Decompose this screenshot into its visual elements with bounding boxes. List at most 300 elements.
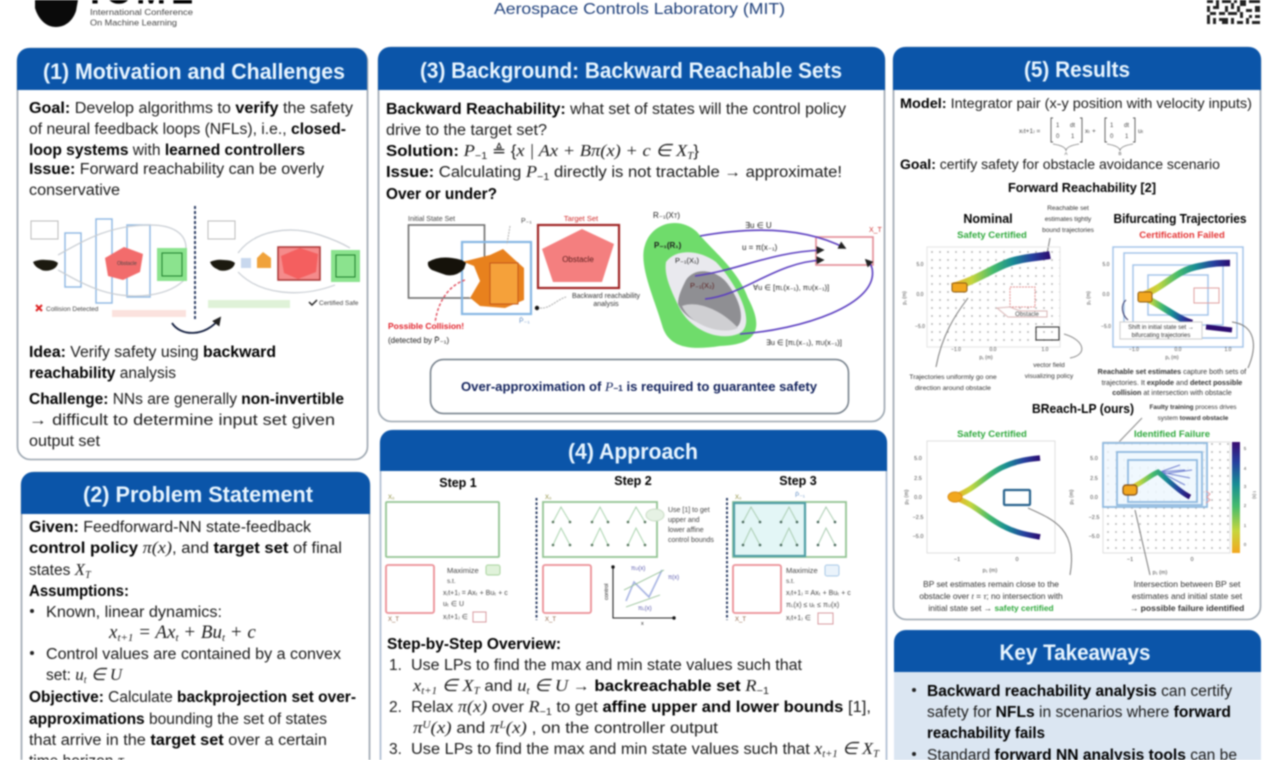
text block: step-by-step overview: T: [474, 686, 481, 697]
chart: BReach-LP identified failure: 4: [1244, 466, 1247, 471]
chart: bifurcating trajectories: p₂ (m): [1086, 291, 1092, 305]
nested sets: [1103, 443, 1207, 507]
right: backward sets: [241, 258, 251, 268]
text block: step-by-step overview: to get: [552, 699, 602, 716]
diagram: over and under approximation: analysis: [593, 301, 619, 308]
text block: step-by-step overview: affine upper and lower bounds [1],: [602, 699, 869, 716]
text block: step-by-step overview: 2.: [389, 699, 402, 716]
text block: challenge: output set: [29, 433, 101, 450]
callout: over-approximation: [430, 360, 848, 414]
right: state box: [208, 221, 235, 239]
step 2 figure: control: [604, 583, 610, 600]
step 2 figure: upper and: [668, 517, 700, 524]
text block: definition: directly is not tractable → approximate!: [549, 164, 842, 181]
text block: assumptions: t: [222, 632, 226, 644]
step 2 figure: X₀: [545, 495, 552, 501]
subheading: forward reachability: Forward Reachability [2]: [1008, 181, 1156, 195]
annotation text: Reachable set estimates capture both sets of: [1098, 367, 1246, 376]
input set with backprojection: [733, 502, 846, 557]
annotation box: [1120, 322, 1202, 339]
chart: nominal: bound trajectories: [1042, 227, 1095, 234]
text block: step-by-step overview: t: [526, 686, 530, 697]
diagram: over and under approximation: P₋₁: [521, 218, 532, 225]
annotation arrow: [1135, 510, 1150, 575]
text block: given: states X: [29, 560, 85, 579]
chart: BReach-LP identified failure: −2.5: [1089, 515, 1099, 521]
step 1 figure: x₍t+1₎ = Axₜ + Buₜ + c: [443, 590, 508, 597]
chart: nominal: p₂ (m): [902, 291, 908, 305]
heading: (3) Background: Backward Reachable Sets: [420, 58, 842, 83]
arrow: transition: [172, 318, 220, 333]
right: obstacle rectangle: [278, 247, 320, 280]
annotation: tight bounds: Reachable set: [1047, 205, 1089, 212]
text block: definition: Backward Reachability: what set of states will the control policy: [386, 101, 846, 118]
equation: dynamics: A: [1064, 151, 1068, 156]
chart: BReach-LP identified failure: −5.0: [1089, 534, 1099, 540]
axis labels: −1.0: [951, 347, 961, 353]
left: collision label: [36, 305, 42, 311]
chart: nominal: −5.0: [915, 324, 925, 330]
text block: definition: x | Ax + Bπ(x) + c ∈ X: [515, 141, 688, 160]
chart: BReach-LP identified failure: 3: [1244, 484, 1247, 489]
target: [386, 565, 434, 613]
panel frame: [378, 48, 884, 422]
text block: assumptions: t: [84, 675, 87, 686]
step 2 figure: πL(x): [638, 606, 652, 612]
diagram: over and under approximation: Possible Collision!: [388, 321, 464, 331]
text block: definition: −1: [475, 151, 488, 162]
panel frame: [380, 430, 886, 760]
equation: dynamics: 0: [1110, 134, 1114, 140]
chart: BReach-LP identified failure: 2.5: [1090, 476, 1098, 482]
equation: dynamics: 1: [1110, 123, 1114, 129]
affiliation line: Aerospace Controls Laboratory (MIT): [494, 1, 785, 18]
chart: BReach-LP identified failure: 0: [1190, 557, 1194, 563]
over-approximation: [462, 242, 531, 314]
text block: assumptions: Control values are contained by a convex: [46, 646, 341, 663]
partition leaf dots: [742, 521, 836, 546]
left: trajectories: [58, 225, 186, 296]
vector field: [1036, 327, 1059, 340]
takeaway list: Backward reachability analysis can certify: [927, 683, 1232, 700]
chart: BReach-LP identified failure: [1069, 429, 1257, 613]
step 2 figure: lower affine: [668, 527, 704, 534]
diagram: over and under approximation: ∃u ∈ [πL(x₋₁), πU(x₋₁)]: [766, 338, 842, 347]
diagram: over and under approximation: Obstacle: [562, 255, 594, 264]
text block: definition: ≜ {: [487, 142, 516, 160]
heading: (2) Problem Statement: [83, 482, 314, 507]
diagram: over and under approximation: X_T: [869, 227, 883, 234]
left: goal: [157, 248, 187, 281]
partition trees: [743, 507, 835, 545]
plot area: [1103, 442, 1230, 553]
heading: Key Takeaways: [1000, 640, 1150, 665]
takeaway list: reachability fails: [927, 725, 1045, 742]
chart: bifurcating trajectories: [1086, 212, 1253, 397]
text block: given: Given: Feedforward-NN state-feedback: [29, 519, 311, 536]
text block: step-by-step overview: t+1: [822, 749, 838, 760]
diagram: over and under approximation: Backward reachability: [572, 293, 641, 300]
initial state: [948, 492, 962, 502]
text block: step-by-step overview: and: [480, 678, 517, 695]
text block: step-by-step overview: Relax π(x) over R: [411, 697, 539, 716]
text block: step-by-step overview: 3.: [389, 741, 402, 758]
chart: BReach-LP identified failure: 0: [1244, 542, 1247, 547]
chart: BReach-LP identified failure: 2: [1244, 503, 1247, 508]
annotation: trajectories: [936, 298, 968, 367]
obstacle: [1194, 288, 1219, 303]
chart: nominal: estimates tightly: [1045, 216, 1092, 223]
step 3 figure: [733, 474, 851, 624]
chart: nominal: visualizing policy: [1025, 373, 1074, 380]
chart: BReach-LP safety certified: Safety Certified: [957, 429, 1027, 440]
subheading: BReach-LP: BReach-LP (ours): [1032, 401, 1134, 416]
backprojection polygon: [462, 249, 524, 308]
target set: [538, 225, 619, 288]
diagram: over and under approximation: (detected by P̄₋₁): [388, 336, 450, 345]
step 1 figure: Step 1: [439, 476, 477, 490]
left: vehicle: [33, 260, 58, 271]
vehicle: [428, 258, 466, 275]
chart: BReach-LP safety certified: 0.0: [914, 495, 922, 501]
left: forward reachable sets: [65, 219, 150, 303]
initial state: [1123, 485, 1137, 495]
left: obstacle: [105, 247, 143, 280]
step 2 figure: x: [641, 621, 644, 627]
chart: nominal: Trajectories uniformly go one: [909, 374, 997, 381]
text block: step-by-step overview: ∈ X: [838, 739, 874, 758]
axis labels: 5.0: [1090, 456, 1098, 462]
diagram: forward vs backward reachability: Obstacle: [117, 261, 137, 267]
target: [733, 565, 781, 613]
panel header: [894, 630, 1261, 672]
step 3 figure: x₍t+1₎ ∈: [786, 615, 811, 622]
chart: nominal: Safety Certified: [957, 230, 1027, 241]
takeaway list: [912, 683, 1237, 760]
text block: step-by-step overview: (x): [506, 718, 527, 737]
right: goal: [331, 250, 360, 282]
diagram: over and under approximation: u = π(x₋₁): [742, 243, 778, 252]
equation: dynamics: xₜ +: [1085, 128, 1096, 135]
step 1 figure: X₀: [388, 495, 395, 501]
diagram: over and under approximation: P₋₁(X₁): [675, 256, 700, 265]
diagram: over and under approximation: R₋₁(XT): [653, 211, 680, 220]
chart: bifurcating trajectories: collision at intersection with obstacle: [1112, 388, 1232, 397]
initial state set: [408, 225, 484, 298]
text block: definition: Solution: P: [386, 141, 474, 160]
panel: (5) Results: [893, 47, 1261, 620]
chart: nominal: direction around obstacle: [915, 385, 991, 392]
text block: assumptions: + c: [225, 622, 256, 643]
panel: (1) Motivation and Challenges: [17, 48, 368, 460]
chart: nominal: 5.0: [917, 262, 924, 268]
heading: (4) Approach: [568, 439, 698, 464]
target: [543, 565, 591, 613]
chart: BReach-LP identified failure: 5: [1244, 446, 1247, 451]
chart: BReach-LP identified failure: −1: [1127, 557, 1133, 563]
text block: step-by-step overview: (x): [431, 718, 452, 737]
text block: given: [29, 519, 342, 581]
text block: step-by-step overview: t+1: [421, 686, 437, 697]
step 1 figure: [386, 476, 508, 623]
equation: dynamics: dt: [1124, 123, 1129, 129]
text block: definition: drive to the target set?: [386, 122, 547, 139]
text block: step-by-step overview: x: [412, 676, 422, 695]
trajectory band: [1126, 472, 1190, 497]
chart: bifurcating trajectories: 0.0: [1103, 292, 1110, 298]
text block: assumptions: x: [109, 622, 117, 643]
chart: affine relaxation: [613, 568, 674, 618]
text block: objective: approximations bounding the set of states: [29, 711, 327, 728]
diagram: forward vs backward reachability: Collision Detected: [46, 306, 99, 313]
divider step 1-2: [536, 498, 538, 620]
chart: nominal: 0.0: [917, 292, 924, 298]
text block: step-by-step overview: Step-by-Step Overview:: [387, 636, 561, 653]
text block: step-by-step overview: −1: [540, 707, 552, 718]
colorbar: [1232, 442, 1240, 553]
equation: dynamics: [1019, 118, 1144, 156]
right: vehicle: [210, 260, 235, 271]
text block: step-by-step overview: , on the controller output: [531, 720, 698, 737]
text block: assumptions: + Bu: [179, 622, 222, 643]
equation: dynamics: 1: [1056, 123, 1060, 129]
text block: challenge: Challenge: NNs are generally non-invertible: [29, 391, 344, 408]
step 1 figure: X_T: [388, 617, 399, 623]
text block: challenge: [29, 391, 344, 450]
right: caption: [208, 300, 290, 308]
equation: dynamics: B: [1118, 151, 1122, 156]
fanned trajectories: [1160, 465, 1192, 485]
diagram: forward vs backward reachability: Certified Safe: [319, 300, 359, 307]
left: state box: [31, 221, 58, 239]
chart: bifurcating trajectories: Certification Failed: [1139, 230, 1225, 241]
text block: objective: [29, 689, 356, 760]
chart: BReach-LP safety certified: −5.0: [913, 534, 923, 540]
text block: assumptions: Known, linear dynamics:: [46, 604, 222, 621]
step 3 figure: x₍t+1₎ = Axₜ + Buₜ + c: [786, 590, 851, 597]
LP formulation: Maximize: [447, 566, 479, 575]
chart: bifurcating trajectories: 1.0: [1225, 347, 1232, 353]
partitioned input set: [543, 502, 657, 557]
step 2 figure: πU(x): [631, 566, 645, 572]
trajectory bands: [953, 458, 1040, 497]
trajectory bands: [1140, 263, 1230, 296]
text block: given: control policy π(x), and target set of final: [29, 538, 342, 557]
panel: (4) Approach: [380, 430, 887, 760]
text block: step-by-step overview: → backreachable set R: [572, 676, 756, 695]
text block: assumptions: Assumptions:: [29, 583, 129, 600]
diagram: over and under approximation: P̄₋₁: [519, 317, 530, 325]
diagram: over and under approximation: P₋₁(X₂): [690, 281, 715, 290]
text block: definition: −1: [537, 172, 550, 183]
chart: BReach-LP identified failure: → possible failure identified: [1130, 603, 1244, 613]
chart: BReach-LP identified failure: p₁ (m): [1153, 570, 1168, 576]
equation: dynamics: uₜ: [1138, 128, 1144, 135]
logo subtitle line 1: International Conference: [90, 7, 193, 17]
diagram: over and under approximation: Target Set: [564, 214, 599, 223]
panel header: [17, 48, 367, 90]
text block: assumptions: = Ax: [133, 622, 176, 643]
text block: assumptions: ∈ U: [87, 665, 124, 684]
obstacle: [1010, 287, 1035, 307]
annotation: faulty training: [1117, 404, 1237, 444]
text block: definition: }: [693, 143, 699, 160]
trajectory band: [952, 255, 1050, 287]
chart: BReach-LP safety certified: 2.5: [914, 476, 922, 482]
panel frame: [18, 48, 368, 460]
text block: goal and issue: Goal: Develop algorithms to verify the safety: [29, 100, 353, 117]
chart: nominal: 1.0: [1042, 347, 1049, 353]
panel frame: [894, 48, 1260, 620]
text block: step-by-step overview: ∈ U: [529, 676, 570, 695]
logo: ICML conference: [35, 0, 193, 28]
chart: bifurcating trajectories: Shift in initial state set →: [1128, 325, 1194, 331]
chart: BReach-LP identified failure: 1: [1244, 523, 1247, 528]
initial state: [1138, 292, 1152, 302]
text block: assumptions: t+1: [117, 632, 133, 644]
text block: step-by-step overview: and π: [456, 718, 499, 737]
text block: idea: [29, 344, 276, 382]
chart: BReach-LP identified failure: t (s): [1252, 491, 1257, 499]
equation: dynamics: x₍t+1₎ =: [1019, 128, 1040, 135]
text block: step-by-step overview: u: [517, 676, 526, 695]
chart: bifurcating trajectories: Bifurcating Trajectories: [1114, 212, 1247, 226]
text block: step-by-step overview: L: [498, 720, 506, 731]
callout: backward reachable analysis: [535, 306, 539, 310]
icon: ICML head silhouette: [35, 0, 78, 27]
text block: goal and issue: of neural feedback loops (NFLs), i.e., closed-: [29, 121, 346, 138]
chart: BReach-LP identified failure: p₂ (m): [1069, 489, 1075, 504]
chart: BReach-LP safety certified: 0: [1015, 557, 1019, 563]
annotation arrow: [1028, 508, 1072, 575]
text block: goal and issue: conservative: [29, 182, 120, 199]
equation: dynamics: dt: [1070, 123, 1075, 129]
initial set: [386, 502, 499, 557]
annotation: faulty training: Faulty training process drives: [1149, 404, 1237, 411]
step 1 figure: s.t.: [447, 578, 456, 585]
obstacle marker: [1206, 491, 1210, 503]
initial state: [952, 283, 967, 292]
text block: goal: Goal: certify safety for obstacle avoidance scenario: [900, 156, 1220, 172]
step 3 figure: s.t.: [786, 578, 795, 585]
diagram: over and under approximation: [388, 211, 883, 348]
note: affine bounds: Use [1] to get: [668, 507, 710, 514]
text block: model: Model: Integrator pair (x-y position with velocity inputs): [900, 95, 1252, 111]
chart: BReach-LP identified failure: 0.0: [1090, 495, 1098, 501]
axis labels: −1.0: [1129, 347, 1139, 353]
text block: step-by-step overview: [387, 636, 881, 760]
nested backprojection sets: [643, 223, 756, 348]
chart: BReach-LP identified failure: Identified Failure: [1134, 429, 1210, 440]
step 2 figure: [543, 474, 714, 627]
text block: goal and issue: loop systems with learned controllers: [29, 142, 305, 159]
text block: step-by-step overview: Use LPs to find the max and min state values such that x: [411, 739, 822, 758]
annotation: faulty training: system toward obstacle: [1158, 415, 1229, 422]
divider step 2-3: [726, 498, 728, 620]
text block: assumptions: set: u: [46, 665, 84, 684]
text block: assumptions: t: [175, 632, 179, 644]
chart: bifurcating trajectories: p₁ (m): [1165, 355, 1179, 361]
axis labels: 5.0: [914, 456, 922, 462]
panel: Key Takeaways: [894, 630, 1261, 760]
labels: control conditions: ∃u ∈ U: [745, 221, 772, 230]
plot area: [1113, 247, 1243, 347]
heading: (5) Results: [1024, 57, 1130, 82]
step 3 figure: X_T: [735, 617, 746, 623]
text block: objective: Objective: Calculate backprojection set over-: [29, 689, 356, 706]
partition tree icons: [553, 507, 645, 545]
target box right: [816, 237, 873, 265]
possible collision label: [435, 280, 465, 323]
text block: challenge: → difficult to determine input set given: [29, 412, 335, 429]
panel: (3) Background: Backward Reachable Sets: [378, 47, 885, 422]
diagram: over and under approximation: Initial State Set: [408, 216, 455, 223]
reachable set estimates: [1113, 247, 1243, 347]
text block: step-by-step overview: π: [413, 718, 423, 737]
text block: step-by-step overview: U: [423, 720, 431, 731]
step 3 figure: πL(x) ≤ uₜ ≤ πU(x): [786, 602, 839, 609]
chart: nominal: [902, 205, 1095, 392]
text block: step-by-step overview: T: [873, 749, 881, 760]
chart: BReach-LP safety certified: [904, 429, 1072, 613]
step 2 figure: control bounds: [668, 537, 714, 544]
step 2 figure: X_T: [545, 617, 556, 623]
panel header: [21, 472, 370, 514]
text block: idea: reachability analysis: [29, 365, 176, 382]
LP formulation: Maximize: [786, 566, 818, 575]
chart: BReach-LP safety certified: p₁ (m): [983, 568, 998, 574]
equation: dynamics: 1: [1125, 134, 1129, 140]
diagram: forward vs backward reachability: [31, 206, 360, 333]
text block: definition: [386, 101, 846, 203]
diagram: over and under approximation: ∀u ∈ [πL(x₋₁), πU(x₋₁)]: [753, 283, 829, 292]
step 1 figure: x₍t+1₎ ∈: [443, 614, 468, 621]
arrows: control paths: [695, 230, 873, 334]
chart: BReach-LP safety certified: obstacle over t = τ; no intersection with: [919, 591, 1063, 601]
chart: nominal: 0.0: [990, 347, 997, 353]
QR code: [1207, 0, 1260, 24]
chart: bifurcating trajectories: 0.0: [1175, 347, 1182, 353]
chart: bifurcating trajectories: −5.0: [1101, 324, 1111, 330]
panel header: [380, 430, 887, 471]
panel frame: [22, 472, 370, 760]
chart: bifurcating trajectories: 5.0: [1103, 262, 1110, 268]
text block: step-by-step overview: 1.: [389, 657, 402, 674]
chart: BReach-LP safety certified: −1: [954, 557, 960, 563]
chart: BReach-LP safety certified: p₂ (m): [904, 489, 910, 504]
caption: Intersection between BP set: [1134, 579, 1241, 589]
takeaway list: safety for NFLs in scenarios where forward: [927, 704, 1231, 721]
text block: given: T: [85, 570, 92, 581]
plot area: [927, 441, 1055, 553]
chart: BReach-LP safety certified: initial state set → safety certified: [928, 603, 1054, 613]
chart: nominal: p₁ (m): [979, 355, 993, 361]
step 2 figure: Step 2: [614, 474, 652, 488]
text block: definition: T: [687, 151, 695, 162]
text block: step-by-step overview: Use LPs to find the max and min state values such that: [411, 657, 803, 674]
chart: bifurcating trajectories: trajectories. It explode and detect possible: [1102, 378, 1242, 387]
backprojection box: [1004, 490, 1030, 505]
text block: definition: Over or under?: [386, 186, 497, 203]
step 3 figure: X₀: [735, 495, 742, 501]
panel header: [893, 47, 1261, 90]
callout: over-approximation: Over-approximation of P−1 is required to guarantee safety: [461, 379, 817, 394]
text block: step-by-step overview: −1: [757, 686, 769, 697]
chart: BReach-LP safety certified: −2.5: [913, 515, 923, 521]
step 3 figure: P̄₋₁: [795, 491, 806, 499]
annotation arrow: [1232, 322, 1253, 368]
callout bubble: [646, 509, 664, 521]
